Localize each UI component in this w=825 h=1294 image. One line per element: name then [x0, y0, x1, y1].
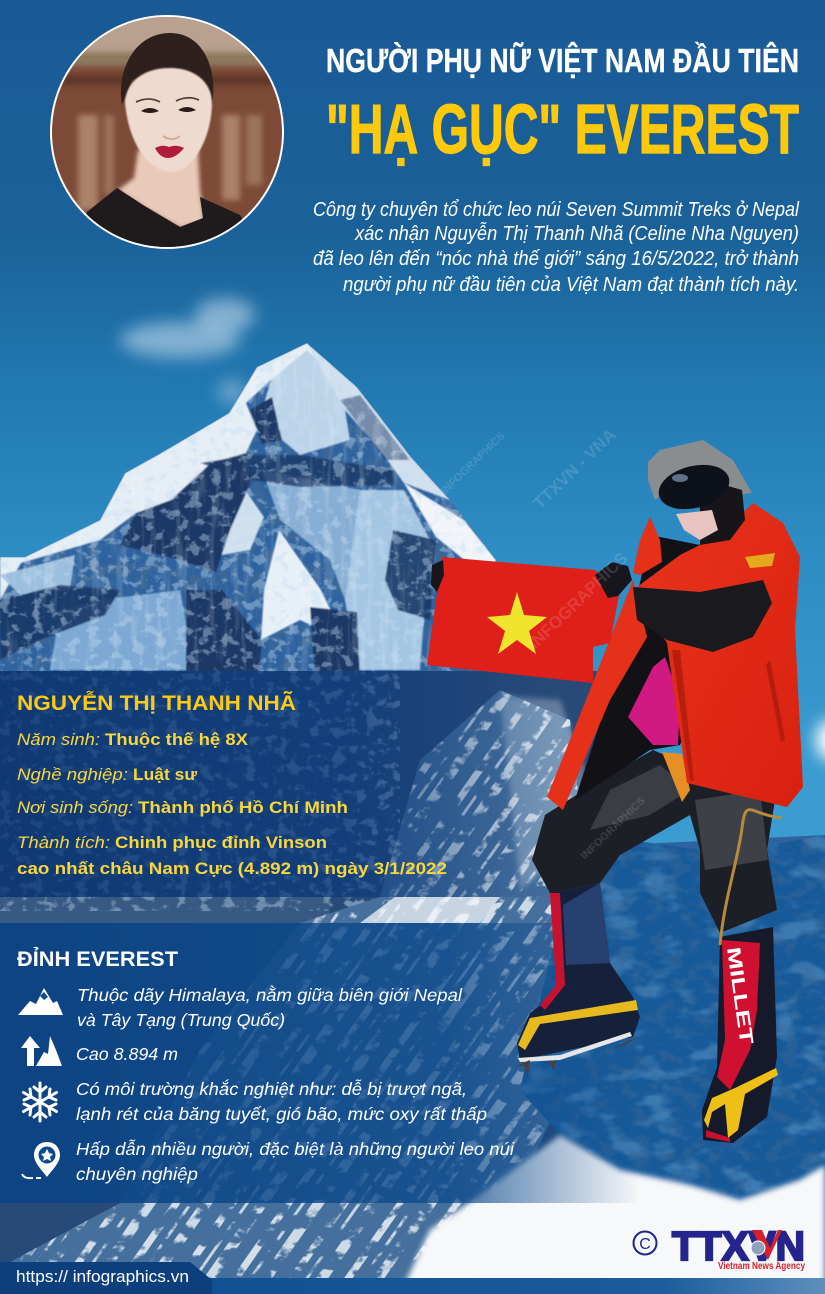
eyebrows and eyes	[136, 98, 199, 102]
title	[326, 42, 799, 168]
birth year: Năm sinh:	[17, 730, 100, 749]
jacket: inner lining	[575, 535, 735, 800]
snow: lower left face	[50, 590, 195, 670]
residence	[17, 798, 348, 817]
text: attraction: chuyên nghiệp	[76, 1164, 198, 1184]
birth year	[17, 730, 249, 749]
watermarks	[439, 425, 648, 862]
fleece: pink	[628, 657, 680, 745]
hair	[121, 33, 213, 105]
text: attraction	[76, 1139, 515, 1184]
flag of Vietnam	[427, 557, 620, 683]
leg: left lower gaiter and boot	[516, 883, 640, 1076]
profile text block	[17, 689, 447, 878]
text: height: Cao 8.894 m	[76, 1044, 178, 1064]
name heading: NGUYỄN THỊ THANH NHÃ	[17, 689, 296, 715]
harness	[662, 752, 690, 802]
intro text block: người phụ nữ đầu tiên của Việt Nam đạt thành tích này.	[343, 274, 799, 296]
mountain: bright snow patch above the band	[500, 695, 585, 890]
jacket: red shell	[633, 503, 803, 807]
glove	[595, 562, 632, 598]
nose	[163, 136, 180, 139]
footer url tab: https:// infographics.vn	[16, 1267, 189, 1286]
copyright mark	[634, 1232, 656, 1254]
legs: insulated trousers	[532, 750, 777, 933]
occupation	[17, 765, 198, 784]
face	[125, 68, 212, 172]
red V mark	[752, 1230, 782, 1260]
rock: dark bands	[0, 395, 436, 680]
watermarks: TTXVN - VNA	[530, 425, 620, 513]
intro text block	[313, 199, 799, 296]
achievement: Chinh phục đỉnh Vinson	[115, 833, 327, 852]
footer bar	[0, 1278, 825, 1294]
black top	[86, 188, 242, 247]
text: MILLET brand on gaiter: MILLET	[722, 946, 757, 1046]
portrait of Nguyễn Thị Thanh Nhã	[50, 14, 284, 250]
logo: copyright and TTXVN	[634, 1223, 805, 1272]
lips	[155, 146, 184, 158]
snow: right face	[345, 490, 430, 670]
footer url tab	[0, 1262, 212, 1294]
jacket logo	[745, 553, 775, 568]
text: location: Thuộc dãy Himalaya, nằm giữa biên giới Nepal	[77, 985, 463, 1005]
text: location	[77, 985, 463, 1030]
icon: mountains	[18, 988, 63, 1015]
neck and chest	[118, 150, 205, 228]
text: harsh environment: lạnh rét của băng tuyết, gió bão, mức oxy rất thấp	[76, 1104, 487, 1124]
panel: gap band shading	[0, 897, 500, 923]
text: harsh environment	[76, 1079, 487, 1124]
achievement	[17, 833, 447, 878]
globe mark	[751, 1241, 765, 1255]
panel: Everest background	[0, 923, 640, 1203]
leg: right lower boot with MILLET gaiter	[702, 927, 778, 1143]
intro text block: đã leo lên đến “nóc nhà thế giới” sáng 16/5/2022, trở thành	[313, 248, 799, 270]
birth year: Thuộc thế hệ 8X	[105, 730, 249, 749]
watermarks: INFOGRAPHICS	[579, 795, 648, 862]
residence: Nơi sinh sống:	[17, 798, 133, 817]
jacket: collar	[633, 517, 662, 575]
texture: vertical snow fluting	[0, 348, 496, 671]
snow: central white facet	[260, 530, 332, 641]
text: location: và Tây Tạng (Trung Quốc)	[77, 1010, 285, 1030]
copyright mark: C	[639, 1236, 651, 1253]
icon: location pin with star	[22, 1142, 60, 1178]
climber figure	[427, 440, 803, 1143]
icon: arrow up and peak	[21, 1036, 62, 1066]
snow: right ridge	[404, 482, 496, 562]
panel: profile background	[0, 671, 560, 897]
watermarks: INFOGRAPHICS	[439, 430, 508, 497]
mountain: main peak and snow fields	[0, 340, 825, 1294]
texture: light specks on rock	[0, 348, 486, 671]
snow: left summit ridge	[0, 343, 345, 600]
watermarks: INFOGRAPHICS	[525, 549, 632, 653]
snow: upper face	[265, 350, 350, 455]
clouds in the sky	[120, 298, 825, 760]
residence: Thành phố Hồ Chí Minh	[138, 798, 348, 817]
text: harsh environment: Có môi trường khắc nghiệt như: dễ bị trượt ngã,	[76, 1079, 467, 1099]
rope	[720, 810, 782, 945]
TTXVN wordmark: TTXVN	[672, 1223, 805, 1269]
text: attraction: Hấp dẫn nhiều người, đặc biệt là những người leo núi	[76, 1139, 515, 1159]
occupation: Luật sư	[133, 765, 198, 784]
Everest heading: ĐỈNH EVEREST	[17, 946, 178, 971]
agency tagline: Vietnam News Agency	[718, 1261, 805, 1272]
jacket: left front strip	[547, 580, 647, 810]
mountain: blue rock under climber	[520, 835, 825, 1200]
achievement: Thành tích:	[17, 833, 110, 852]
achievement: cao nhất châu Nam Cực (4.892 m) ngày 3/1/2022	[17, 859, 447, 878]
head	[648, 440, 752, 545]
mountain: lower slopes behind the panels	[0, 671, 600, 1294]
occupation: Nghề nghiệp:	[17, 765, 128, 784]
icon: snowflake	[24, 1083, 56, 1121]
mountain: snow and cloud at the base	[400, 1135, 825, 1294]
texture: speckled rock base	[2, 393, 476, 671]
jacket: black sleeve	[633, 580, 772, 652]
